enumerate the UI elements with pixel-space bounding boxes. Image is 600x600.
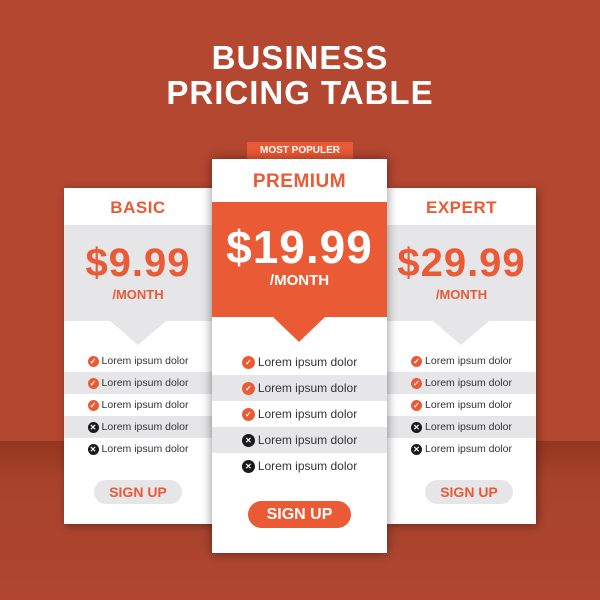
premium price box (212, 202, 387, 317)
premium features: Lorem ipsum dolor (258, 433, 357, 447)
premium features (212, 355, 387, 473)
expert features: ✕ (413, 422, 420, 432)
premium sign up button: SIGN UP (267, 506, 332, 523)
expert features: Lorem ipsum dolor (425, 399, 512, 411)
basic features: ✓ (90, 378, 96, 388)
premium features: Lorem ipsum dolor (258, 459, 357, 473)
expert price box: /MONTH (436, 287, 487, 302)
most popular tab: MOST POPULER (260, 145, 340, 156)
basic sign up button: SIGN UP (109, 484, 167, 500)
premium features: Lorem ipsum dolor (258, 407, 357, 421)
floor background (0, 441, 600, 600)
basic features: Lorem ipsum dolor (102, 399, 188, 411)
expert features: Lorem ipsum dolor (425, 443, 512, 455)
title: BUSINESS (212, 39, 388, 76)
basic features: Lorem ipsum dolor (102, 443, 188, 455)
premium sign up button (248, 501, 351, 528)
title: PRICING TABLE (166, 74, 434, 111)
premium features: Lorem ipsum dolor (258, 355, 357, 369)
expert features: ✕ (413, 444, 420, 454)
expert sign up button: SIGN UP (440, 484, 498, 500)
premium heading: PREMIUM (253, 171, 346, 192)
panel: premium (212, 159, 387, 553)
expert features: ✓ (413, 378, 420, 388)
basic features: ✓ (90, 400, 96, 410)
expert features: Lorem ipsum dolor (425, 377, 512, 389)
expert features: ✓ (413, 356, 420, 366)
expert features (387, 355, 536, 455)
premium price box: /MONTH (270, 272, 329, 289)
basic features: Lorem ipsum dolor (102, 377, 188, 389)
basic features: Lorem ipsum dolor (102, 355, 188, 367)
expert price box (387, 225, 536, 321)
premium features: ✓ (245, 410, 252, 418)
premium features: ✓ (245, 384, 252, 392)
premium features: ✓ (245, 358, 252, 366)
premium arrow (272, 316, 326, 342)
expert heading: EXPERT (426, 198, 497, 217)
expert features: ✓ (413, 400, 420, 410)
panel: expert (387, 188, 536, 524)
basic features: ✕ (90, 444, 96, 454)
most popular tab (247, 142, 353, 159)
basic arrow (110, 321, 166, 345)
premium price box: $19.99 (226, 221, 373, 273)
panel: basic (64, 188, 212, 524)
premium features: ✕ (245, 462, 252, 470)
basic heading: BASIC (110, 198, 166, 217)
expert features: Lorem ipsum dolor (425, 355, 512, 367)
premium features: ✕ (245, 436, 252, 444)
basic sign up button (94, 480, 182, 504)
basic features: Lorem ipsum dolor (102, 421, 188, 433)
basic features: ✕ (90, 422, 96, 432)
title (166, 39, 434, 111)
basic features: ✓ (90, 356, 96, 366)
expert sign up button (425, 480, 513, 504)
expert price box: $29.99 (397, 241, 526, 285)
expert arrow (433, 321, 489, 345)
basic price box: $9.99 (85, 241, 191, 285)
premium features: Lorem ipsum dolor (258, 381, 357, 395)
basic features (64, 355, 212, 455)
expert features: Lorem ipsum dolor (425, 421, 512, 433)
basic price box: /MONTH (112, 287, 164, 302)
basic price box (64, 225, 212, 321)
